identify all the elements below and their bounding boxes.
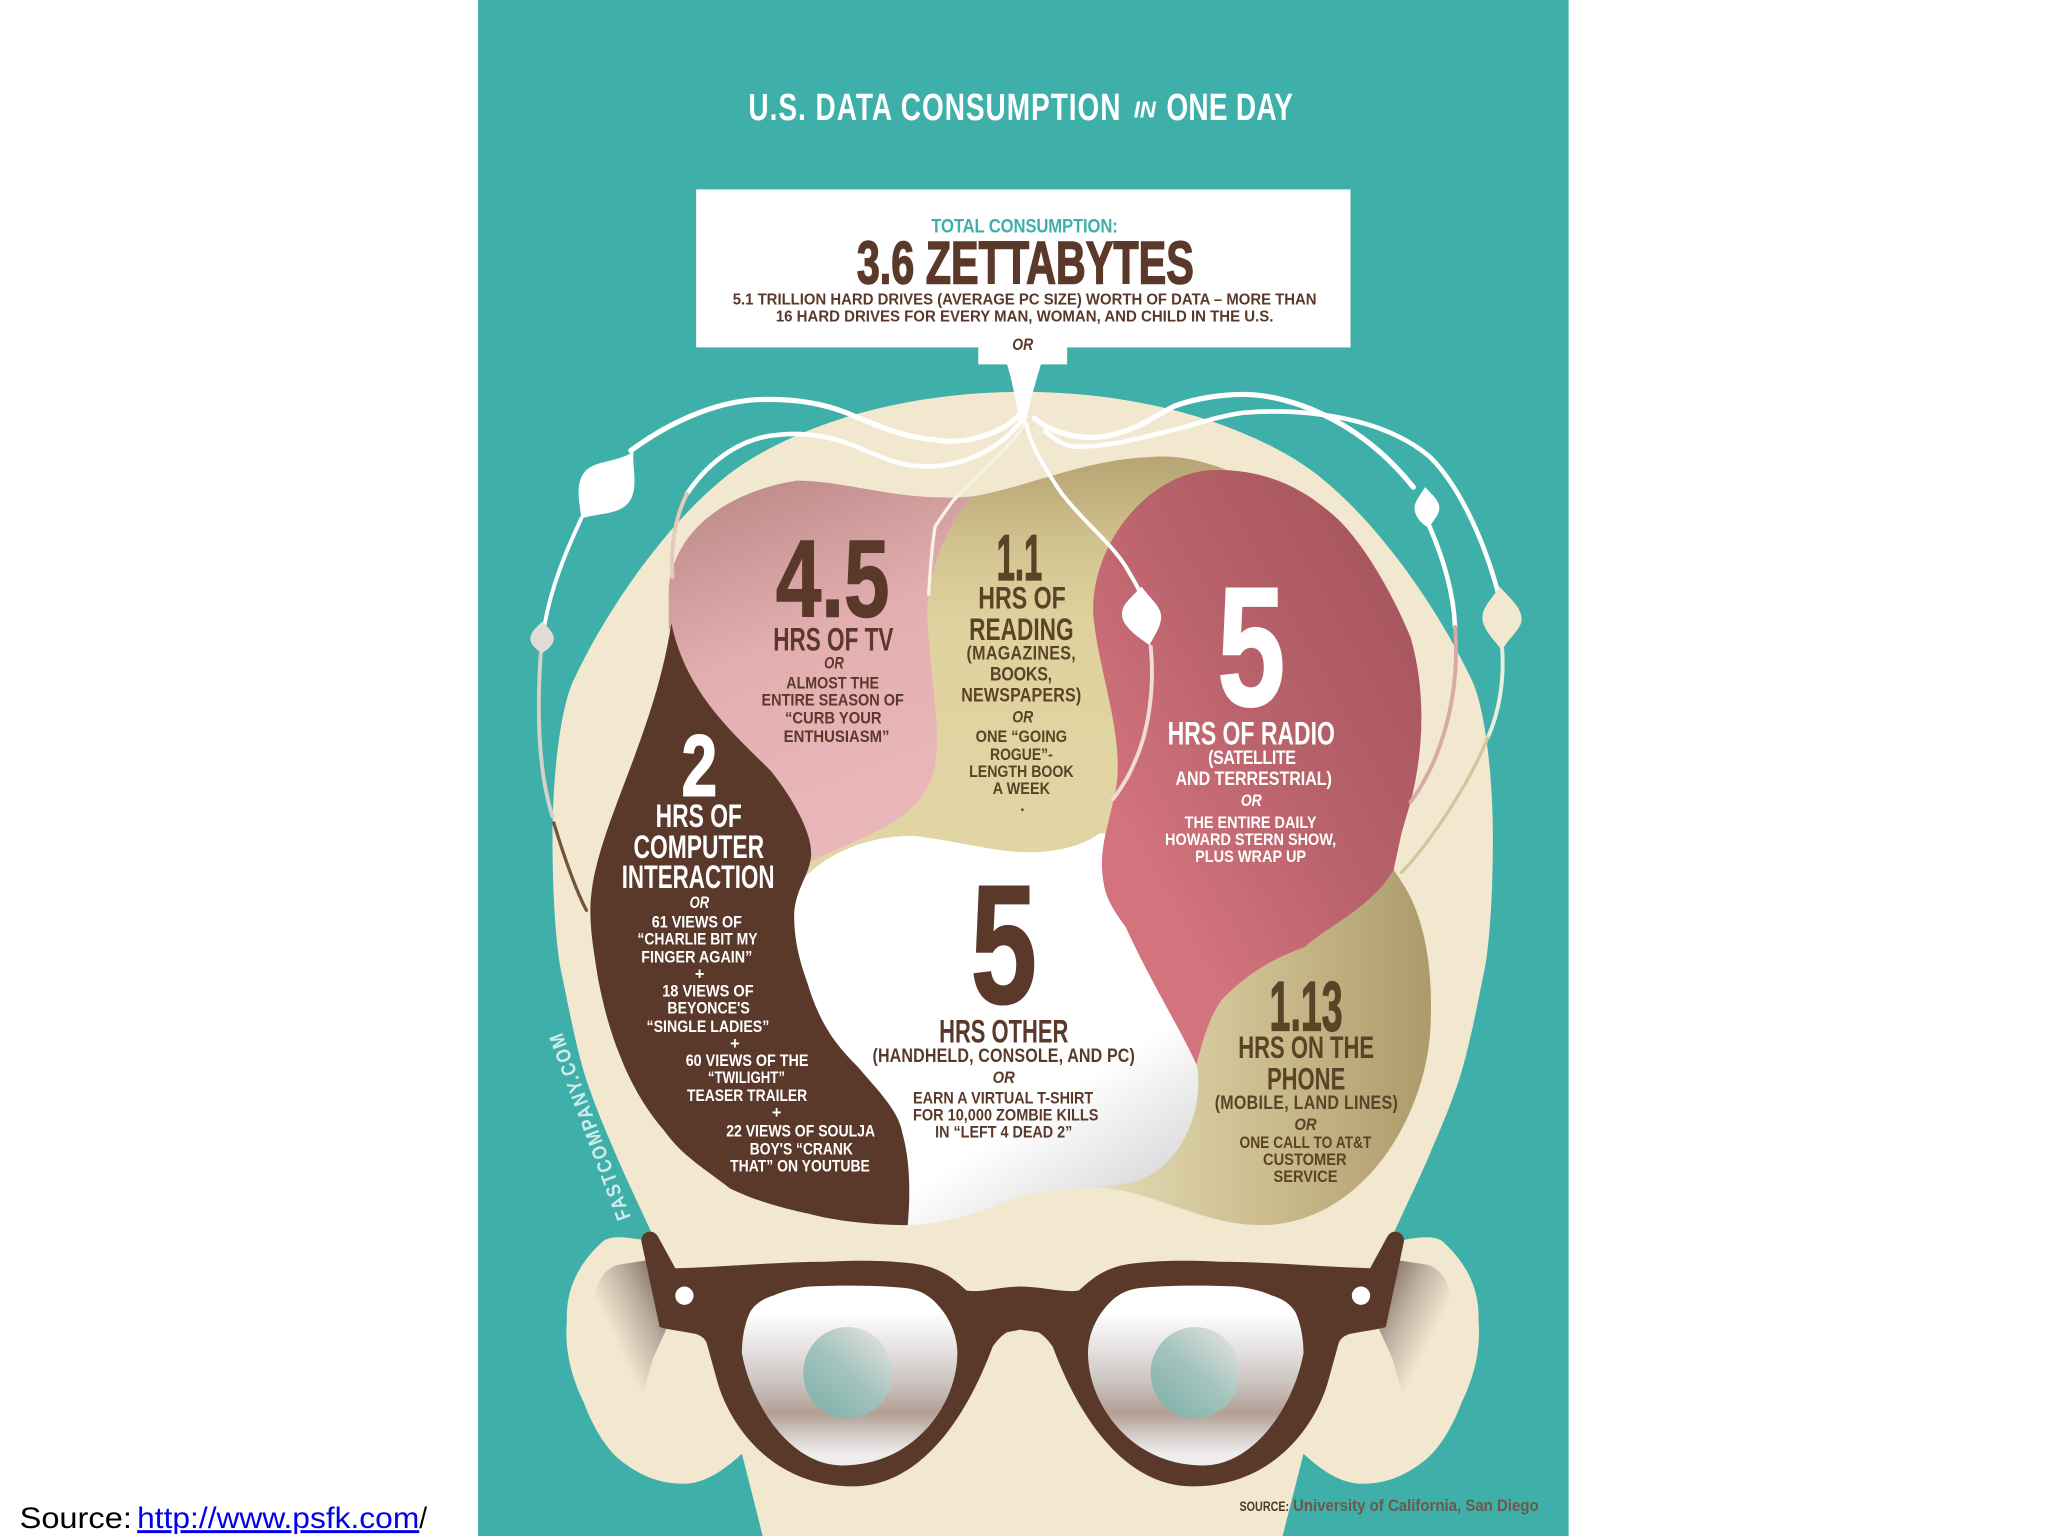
node: upper right blob [1415, 487, 1439, 528]
computer comparison: “CHARLIE BIT MY [637, 930, 758, 948]
radio comparison: PLUS WRAP UP [1195, 848, 1306, 866]
heading: hrs of reading: (MAGAZINES, [967, 642, 1076, 664]
right lens [1088, 1286, 1304, 1465]
title: U.S. DATA CONSUMPTION [748, 87, 1121, 129]
heading: hrs of reading: HRS OF [978, 581, 1066, 616]
panel: other [872, 849, 1135, 1142]
heading: hrs on the phone: PHONE [1267, 1061, 1345, 1096]
heading: hrs other: HRS OTHER [939, 1012, 1068, 1049]
heading: hrs of computer interaction [622, 797, 775, 895]
heading: hrs of radio [1168, 714, 1335, 789]
reading comparison: . [1020, 797, 1025, 815]
computer comparison: FINGER AGAIN” [641, 949, 752, 967]
node: radio blob [1122, 586, 1161, 645]
heading: hrs of reading: NEWSPAPERS) [961, 684, 1081, 706]
other comparison [913, 1068, 1099, 1142]
TV comparison: “CURB YOUR [785, 710, 882, 728]
reading comparison: ONE “GOING [976, 728, 1067, 746]
source credit: SOURCE: [1240, 1499, 1289, 1514]
panel: radio [1165, 551, 1336, 866]
computer comparison: + [695, 966, 704, 984]
computer comparison: + [772, 1104, 781, 1122]
heading: hrs of reading: READING [969, 612, 1074, 647]
heading: hrs on the phone [1215, 1030, 1398, 1113]
computer comparison: 61 VIEWS OF [652, 913, 742, 931]
heading: hrs of radio: HRS OF RADIO [1168, 714, 1335, 751]
total consumption description: 5.1 TRILLION HARD DRIVES (AVERAGE PC SIZE) WORTH OF DATA – MORE THAN [733, 291, 1317, 308]
total consumption description: 16 HARD DRIVES FOR EVERY MAN, WOMAN, AND CHILD IN THE U.S. [776, 308, 1273, 325]
title: ONE DAY [1166, 87, 1293, 129]
brain segment: phone backdrop [1095, 870, 1431, 1225]
computer comparison: TEASER TRAILER [687, 1087, 807, 1105]
connector lines from total box to segments [539, 394, 1503, 910]
brain segment: TV [669, 481, 973, 862]
left lens [742, 1286, 957, 1465]
heading: hrs of computer interaction: HRS OF [656, 797, 742, 834]
figure: 1.1: 1.1 [997, 521, 1042, 594]
computer comparison: THAT” ON YOUTUBE [730, 1158, 870, 1176]
radio comparison [1165, 791, 1336, 866]
panel: computer interaction [622, 718, 875, 1176]
heading: hrs on the phone: (MOBILE, LAND LINES) [1215, 1091, 1398, 1113]
computer comparison: 18 VIEWS OF [662, 983, 754, 1001]
brain segment: other [771, 833, 1198, 1225]
radio comparison: OR [1241, 791, 1262, 810]
figure: 2: 2 [682, 718, 717, 814]
reading comparison: A WEEK [993, 780, 1050, 798]
other comparison: IN “LEFT 4 DEAD 2” [935, 1124, 1072, 1142]
heading: hrs on the phone: HRS ON THE [1238, 1030, 1374, 1065]
heading: hrs of reading: BOOKS, [990, 663, 1052, 685]
phone comparison: SERVICE [1273, 1168, 1338, 1186]
title: IN [1134, 97, 1157, 123]
TV comparison: ENTIRE SEASON OF [761, 691, 904, 709]
TV comparison [761, 654, 904, 746]
node: large left blob [579, 452, 635, 519]
phone comparison: OR [1294, 1115, 1317, 1134]
radio comparison: HOWARD STERN SHOW, [1165, 831, 1336, 849]
other comparison: EARN A VIRTUAL T-SHIRT [913, 1090, 1093, 1108]
illustration: head with ears [552, 392, 1493, 1536]
or connector label: OR [1012, 335, 1034, 354]
panel: TV [761, 518, 904, 746]
figure: 5: 5 [1217, 551, 1285, 741]
computer comparison: “SINGLE LADIES” [647, 1018, 769, 1036]
computer comparison: “TWILIGHT” [708, 1069, 785, 1087]
heading: hrs of radio: AND TERRESTRIAL) [1176, 767, 1332, 789]
title [748, 87, 1293, 129]
phone comparison: ONE CALL TO AT&T [1240, 1134, 1371, 1152]
node: far right blob [1482, 586, 1522, 650]
other comparison: OR [993, 1068, 1016, 1087]
total consumption description [733, 291, 1317, 325]
computer comparison: BOY'S “CRANK [750, 1141, 853, 1159]
TV comparison: ALMOST THE [786, 674, 879, 692]
computer comparison: BEYONCE'S [667, 1000, 750, 1018]
headline figure: 3.6 ZETTABYTES [857, 229, 1194, 296]
computer comparison [637, 893, 875, 1176]
illustration: glasses [641, 1232, 1404, 1486]
footer source link: / [419, 1502, 428, 1535]
heading: hrs other: (HANDHELD, CONSOLE, AND PC) [872, 1044, 1135, 1066]
reading comparison: OR [1012, 707, 1034, 726]
node: small left diamond [530, 622, 554, 653]
source credit: University of California, San Diego [1293, 1497, 1539, 1515]
footer source link: Source: [20, 1502, 132, 1535]
TV comparison: ENTHUSIASM” [784, 728, 889, 746]
other comparison: FOR 10,000 ZOMBIE KILLS [913, 1107, 1099, 1125]
computer comparison: 60 VIEWS OF THE [686, 1052, 809, 1070]
figure: 1.13: 1.13 [1270, 967, 1343, 1046]
heading: hrs of computer interaction: COMPUTER [633, 828, 764, 865]
brain segment: radio [1093, 470, 1421, 1064]
figure: 4.5: 4.5 [776, 518, 889, 640]
panel: reading [961, 521, 1081, 815]
computer comparison: + [730, 1035, 740, 1053]
footer source link: http://www.psfk.com [137, 1502, 419, 1535]
radio comparison: THE ENTIRE DAILY [1185, 814, 1317, 832]
brain segment: reading [797, 456, 1234, 901]
computer comparison: 22 VIEWS OF SOULJA [726, 1122, 875, 1140]
heading: hrs of reading [961, 581, 1081, 706]
reading comparison: LENGTH BOOK [969, 763, 1074, 781]
heading: hrs of computer interaction: INTERACTION [622, 858, 775, 895]
teal poster background [478, 0, 1569, 1536]
panel: total consumption [696, 189, 1351, 424]
TV comparison: OR [824, 654, 844, 673]
heading: hrs of TV: HRS OF TV [773, 620, 894, 657]
reading comparison: ROGUE”- [990, 746, 1053, 764]
phone comparison [1240, 1115, 1371, 1186]
heading: hrs of radio: (SATELLITE [1208, 747, 1296, 768]
brain segment: computer [590, 623, 909, 1225]
heading: hrs other [872, 1012, 1135, 1066]
total consumption label: TOTAL CONSUMPTION: [931, 215, 1118, 237]
phone comparison: CUSTOMER [1263, 1151, 1347, 1169]
computer comparison: OR [690, 893, 710, 912]
reading comparison [969, 707, 1074, 815]
right hinge dot [1352, 1287, 1370, 1305]
left hinge dot [675, 1287, 694, 1305]
footer source link [20, 1502, 428, 1535]
panel: phone [1215, 967, 1398, 1186]
vertical credit: fastcompany.com: FASTCOMPANY.COM [545, 1031, 635, 1224]
figure: 5: 5 [970, 849, 1037, 1039]
